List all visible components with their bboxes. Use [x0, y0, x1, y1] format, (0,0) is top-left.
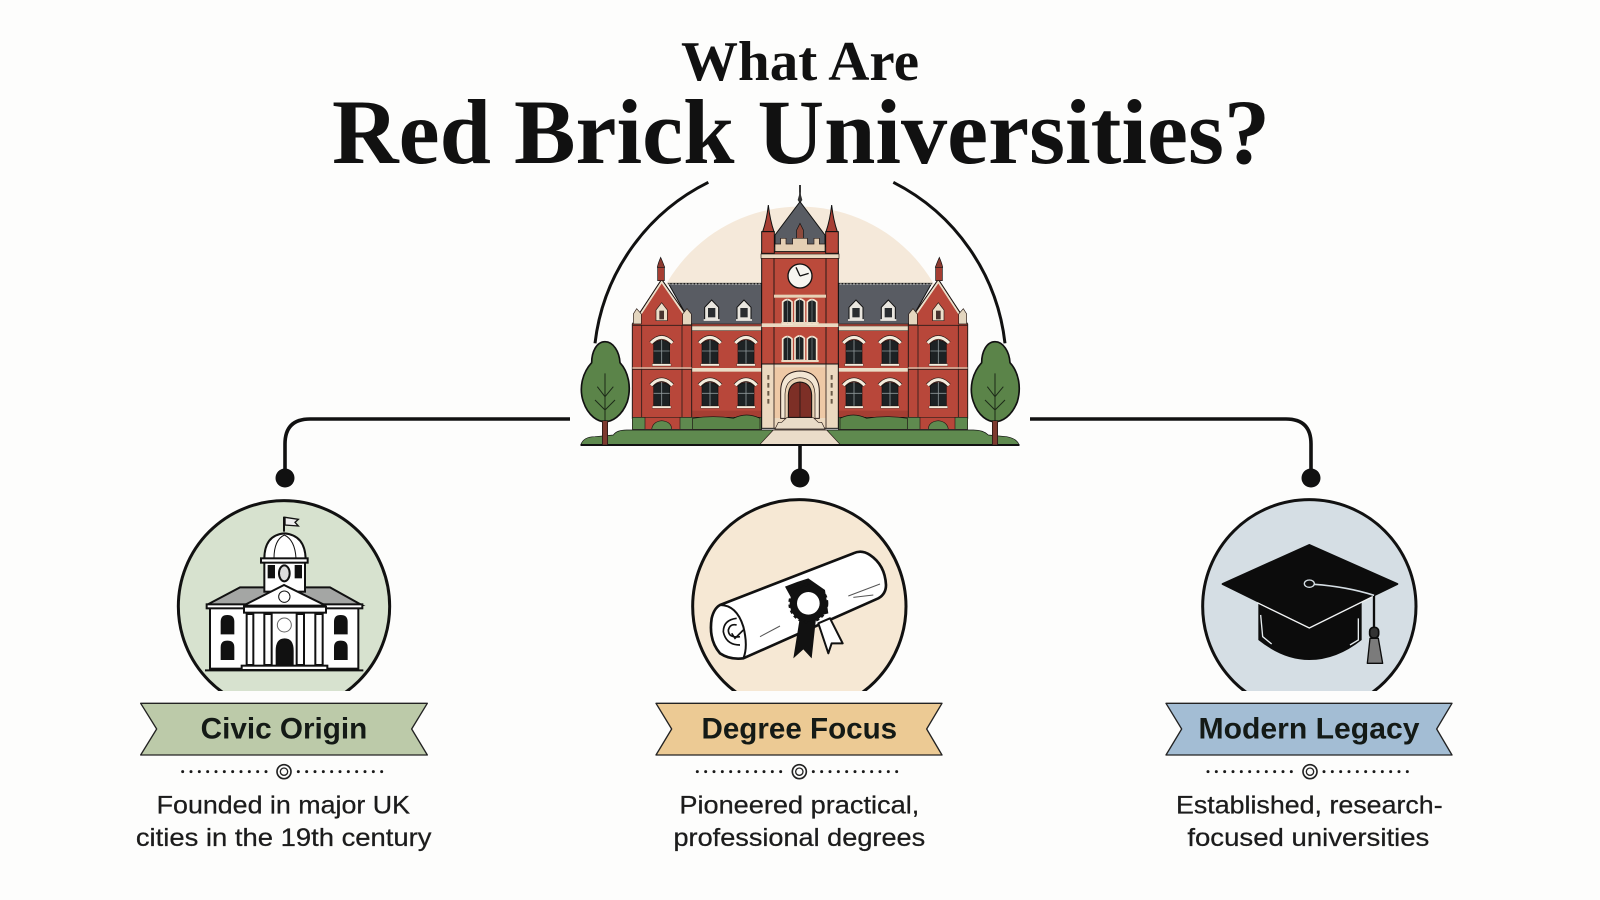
entrance door	[781, 371, 819, 418]
description: Pioneered practical,	[679, 791, 919, 819]
ribbon: Civic Origin: Civic Origin	[201, 712, 367, 745]
panel: Degree Focus	[656, 500, 942, 852]
clock tower	[759, 185, 841, 445]
description: focused universities	[1187, 824, 1429, 852]
panel: Modern Legacy	[1166, 500, 1452, 852]
icon: graduation cap	[1223, 545, 1397, 663]
description: Established, research-	[1176, 791, 1443, 819]
description: professional degrees	[673, 824, 925, 852]
description	[136, 791, 432, 852]
ribbon: Modern Legacy: Modern Legacy	[1198, 712, 1420, 745]
description	[1176, 791, 1443, 852]
ribbon: Modern Legacy	[1166, 703, 1452, 755]
title	[332, 31, 1270, 183]
left tree	[581, 342, 629, 445]
ribbon: Degree Focus: Degree Focus	[701, 712, 897, 745]
dome arc	[595, 182, 1005, 343]
title: What Are	[681, 31, 919, 93]
description: Founded in major UK	[157, 791, 410, 819]
ribbon: Civic Origin	[141, 703, 427, 755]
connector: right branch	[1030, 419, 1320, 488]
right wing	[837, 257, 968, 429]
icon circle	[1203, 500, 1416, 713]
icon: civic building	[205, 517, 363, 670]
connector: centre branch	[790, 445, 810, 488]
divider ornament	[697, 765, 905, 779]
path	[759, 430, 841, 445]
lawn and ground	[581, 430, 1019, 445]
sun backdrop	[666, 206, 934, 285]
left wing	[632, 257, 763, 429]
icon circle	[178, 501, 390, 712]
divider ornament	[1208, 765, 1416, 779]
connector: left branch	[276, 419, 570, 488]
icon: diploma scroll	[711, 552, 886, 659]
steps	[775, 418, 825, 429]
divider ornament	[183, 765, 390, 779]
panel: Civic Origin	[136, 501, 432, 852]
title: Red Brick Universities?	[332, 81, 1270, 183]
illustration: red brick university building	[580, 181, 1020, 446]
ribbon: Degree Focus	[656, 703, 942, 755]
right tree	[971, 342, 1019, 445]
icon circle	[693, 500, 906, 713]
description	[673, 791, 925, 852]
tower windows	[781, 299, 819, 362]
clock	[788, 264, 812, 288]
description: cities in the 19th century	[136, 824, 432, 852]
